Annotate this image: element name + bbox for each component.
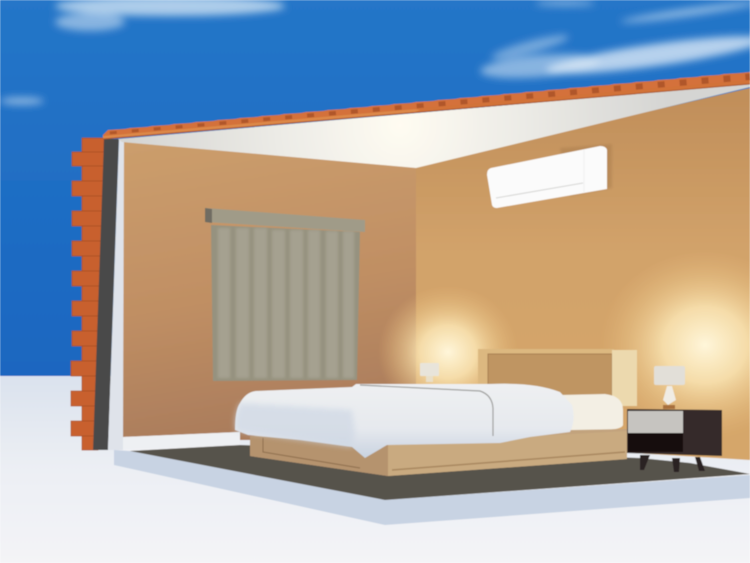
clouds (0, 0, 750, 105)
bed (235, 349, 637, 476)
right wall (416, 88, 750, 460)
roof tiles (103, 72, 750, 139)
duvet (235, 384, 574, 458)
brick wall section (71, 138, 104, 450)
mattress (560, 394, 623, 432)
ground (0, 376, 750, 563)
wall light glows (384, 266, 750, 422)
floor (114, 432, 750, 525)
bed base (250, 429, 627, 476)
air conditioner (487, 144, 612, 208)
left wall (123, 141, 420, 440)
left bedside lamp (420, 363, 439, 382)
ceiling (118, 84, 750, 168)
nightstand (627, 409, 722, 472)
curtain (205, 208, 365, 381)
right bedside lamp (654, 366, 685, 409)
dark insulation layer (93, 139, 119, 450)
headboard (478, 349, 637, 409)
white inner wall edge (108, 139, 125, 450)
sky background (0, 0, 750, 380)
